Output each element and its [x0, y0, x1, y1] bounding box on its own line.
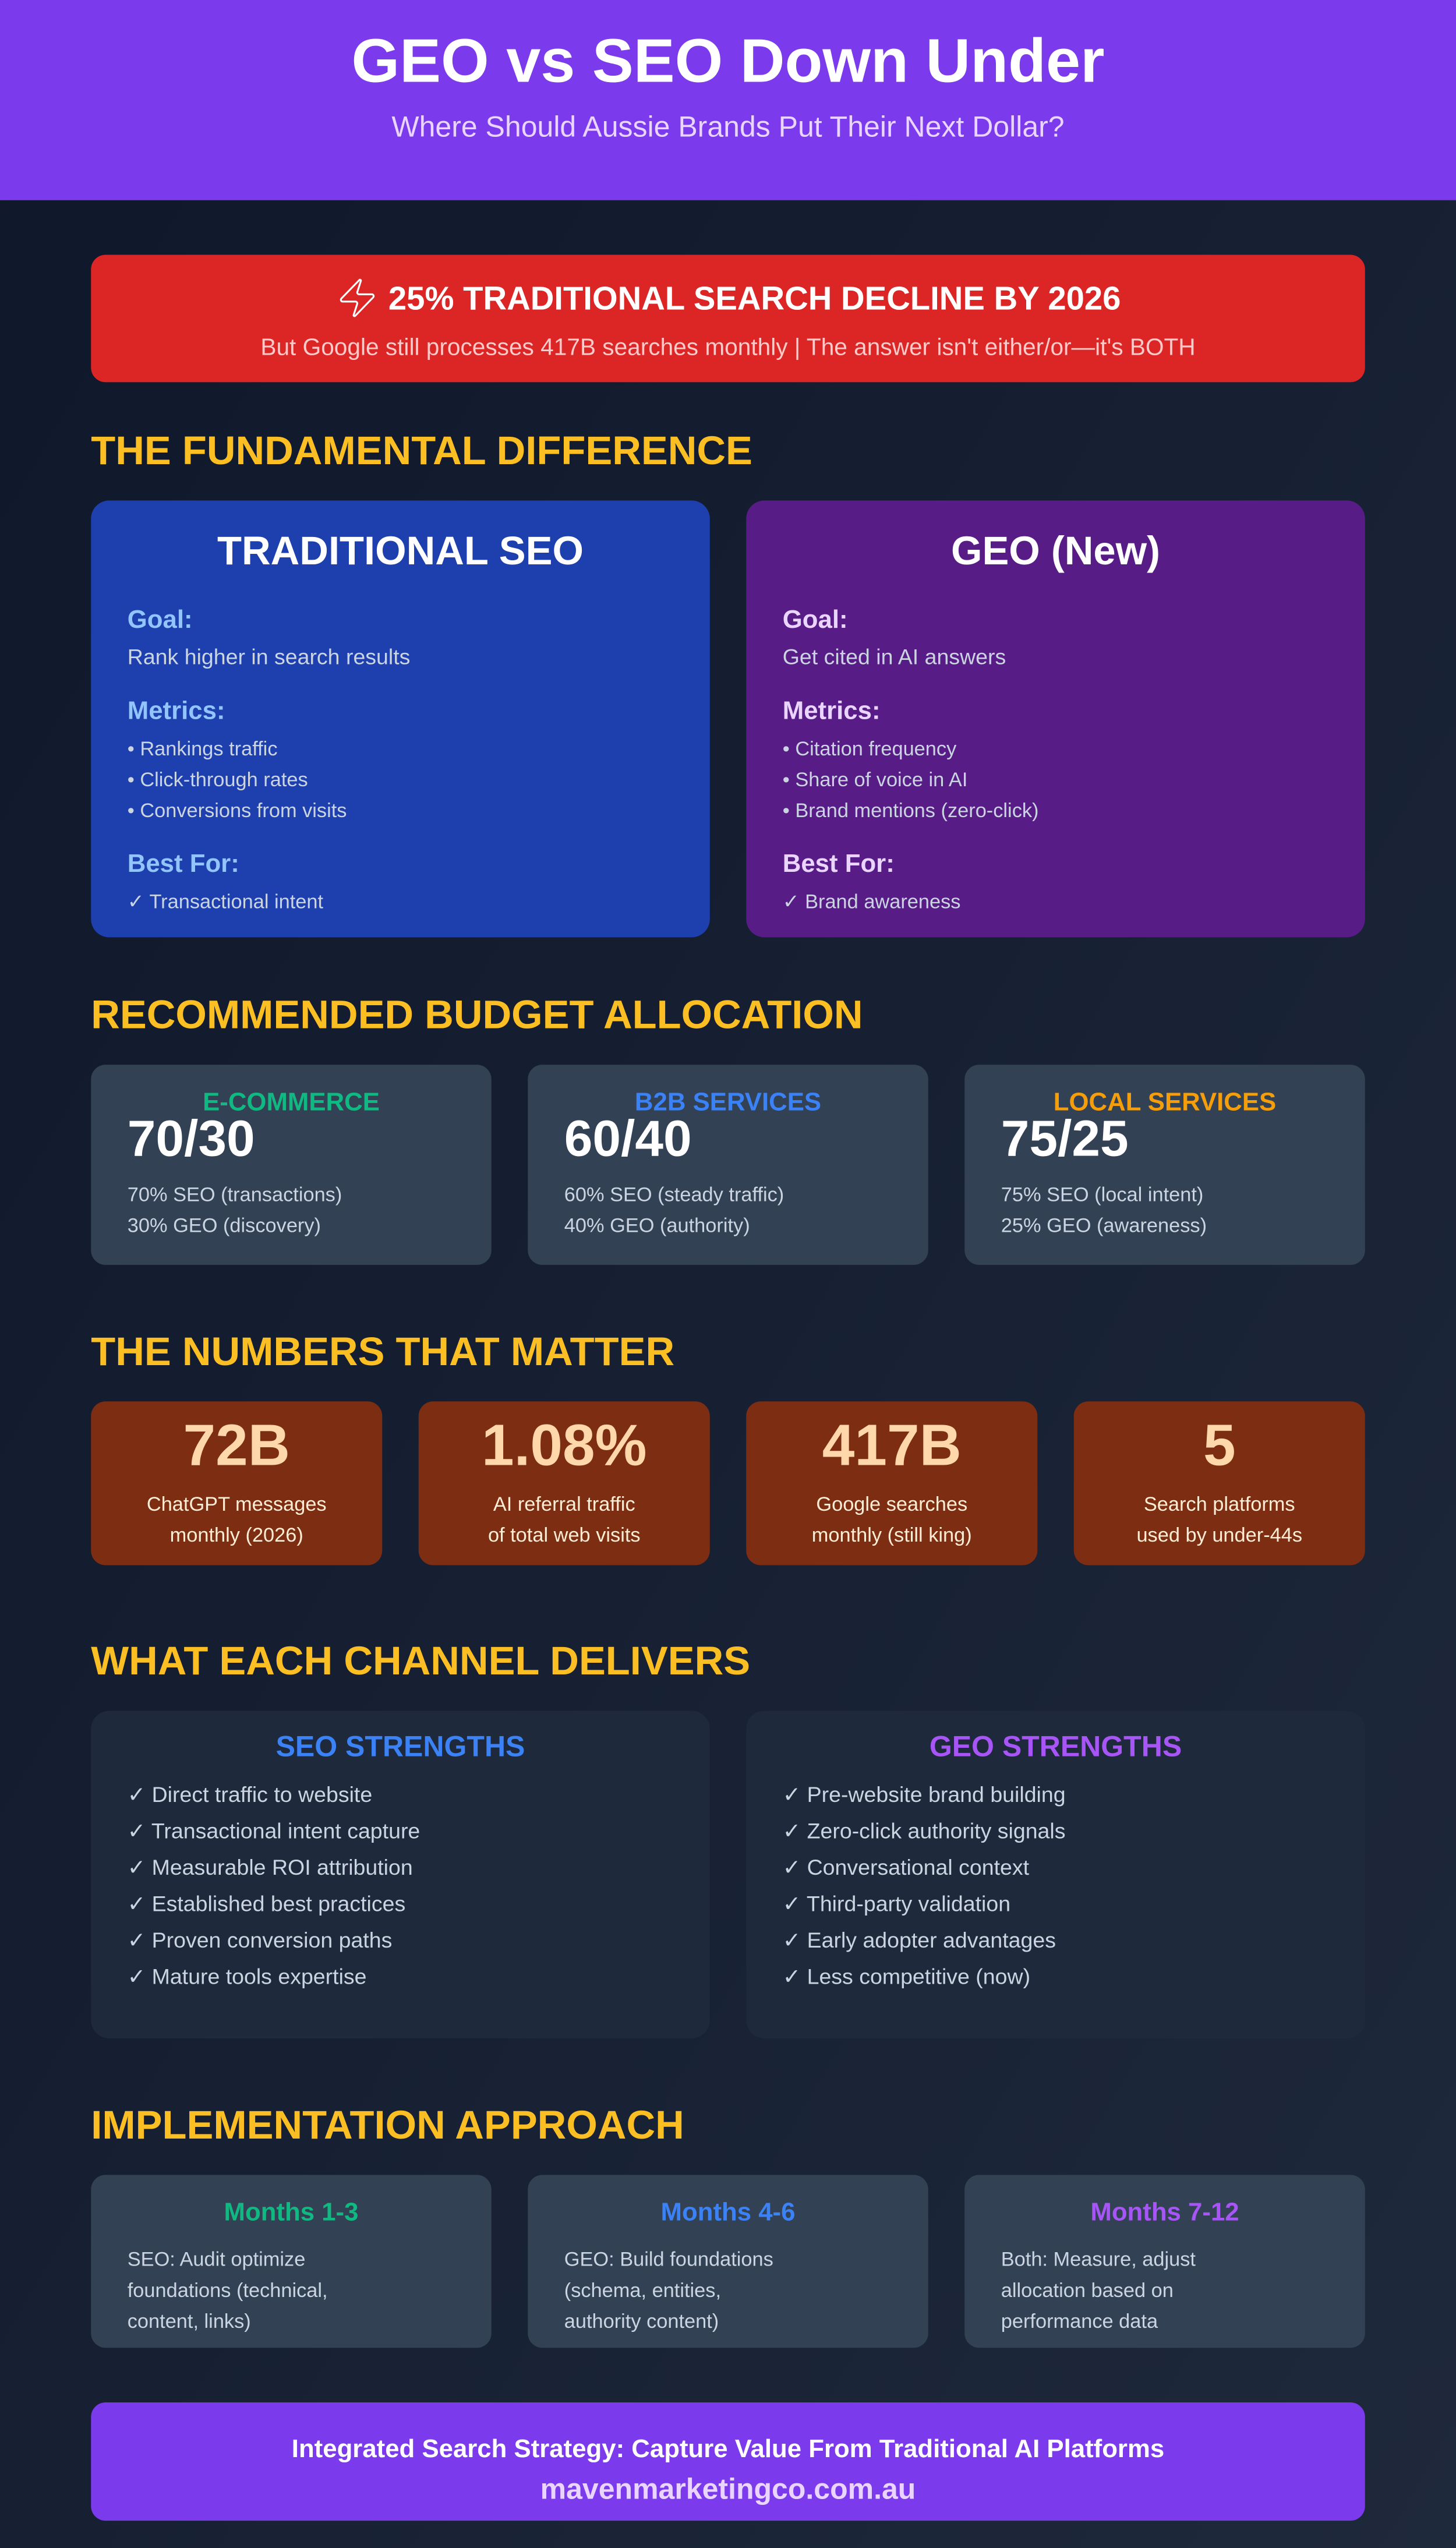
split value: 60/40: [564, 1109, 692, 1167]
strengths list: ✓ Conversational context: [783, 1855, 1030, 1879]
split value: 70/30: [128, 1109, 255, 1167]
stat number: 72B: [183, 1413, 290, 1478]
stat number: 1.08%: [482, 1413, 647, 1478]
best for text: ✓ Brand awareness: [783, 890, 960, 913]
goal text: Get cited in AI answers: [783, 645, 1006, 669]
strengths list: ✓ Transactional intent capture: [128, 1818, 420, 1843]
stat: 417B: [746, 1401, 1037, 1565]
phase title: Months 1-3: [224, 2198, 358, 2227]
strengths list: ✓ Established best practices: [128, 1891, 405, 1916]
goal label: Goal:: [783, 605, 848, 634]
panel: GEO strengths: [746, 1711, 1365, 2038]
card label: B2B SERVICES: [635, 1087, 821, 1116]
stat label: of total web visits: [488, 1524, 641, 1546]
card label: E-COMMERCE: [203, 1087, 380, 1116]
metrics list: [783, 738, 1038, 822]
panel: GEO: [746, 500, 1365, 937]
stat label: Google searches: [816, 1493, 967, 1515]
strengths list: ✓ Measurable ROI attribution: [128, 1855, 413, 1879]
heading: the numbers that matter: THE NUMBERS THAT MATTER: [91, 1329, 674, 1374]
stat: 72B: [91, 1401, 382, 1565]
strengths list: ✓ Mature tools expertise: [128, 1964, 367, 1988]
footer tagline: Integrated Search Strategy: Capture Value From Traditional AI Platforms: [292, 2434, 1164, 2463]
goal text: Rank higher in search results: [128, 645, 410, 669]
phase text: SEO: Audit optimize: [128, 2249, 305, 2271]
panel title: GEO (New): [951, 528, 1160, 573]
alert banner: [91, 255, 1365, 382]
phase text: performance data: [1001, 2310, 1158, 2333]
goal label: Goal:: [128, 605, 193, 634]
strengths list: ✓ Less competitive (now): [783, 1964, 1030, 1988]
stat number: 5: [1203, 1413, 1236, 1478]
metrics list: • Click-through rates: [128, 769, 308, 791]
split details: [1001, 1183, 1207, 1237]
phase text: authority content): [564, 2310, 719, 2333]
panel title: TRADITIONAL SEO: [217, 528, 584, 573]
strengths list: ✓ Early adopter advantages: [783, 1928, 1056, 1952]
phase text: [128, 2249, 328, 2333]
card: e-commerce: [91, 1065, 492, 1265]
stat: 1.08%: [419, 1401, 710, 1565]
stat label: [1136, 1493, 1302, 1546]
phase title: Months 7-12: [1090, 2198, 1239, 2227]
metrics list: • Conversions from visits: [128, 800, 347, 822]
stat label: ChatGPT messages: [147, 1493, 327, 1515]
best for label: Best For:: [783, 849, 895, 878]
stat: 5: [1074, 1401, 1365, 1565]
title: GEO vs SEO Down Under: [352, 26, 1104, 96]
phase text: allocation based on: [1001, 2280, 1174, 2302]
phase card: months 4-6: [528, 2175, 928, 2348]
split value: 75/25: [1001, 1109, 1129, 1167]
phase text: Both: Measure, adjust: [1001, 2249, 1196, 2271]
card: B2B services: [528, 1065, 928, 1265]
metrics list: • Rankings traffic: [128, 738, 277, 760]
heading: the fundamental difference: THE FUNDAMENTAL DIFFERENCE: [91, 428, 752, 473]
best for text: ✓ Transactional intent: [128, 890, 323, 913]
metrics list: [128, 738, 347, 822]
split details: 70% SEO (transactions): [128, 1183, 342, 1206]
subtitle: Where Should Aussie Brands Put Their Next Dollar?: [391, 110, 1065, 143]
stat label: [147, 1493, 327, 1546]
alert headline: 25% TRADITIONAL SEARCH DECLINE BY 2026: [388, 280, 1121, 316]
stat label: AI referral traffic: [493, 1493, 635, 1515]
header banner: [0, 0, 1456, 200]
stat label: monthly (2026): [170, 1524, 303, 1546]
phase text: (schema, entities,: [564, 2280, 721, 2302]
card label: LOCAL SERVICES: [1054, 1087, 1276, 1116]
stat number: 417B: [822, 1413, 962, 1478]
strengths list: ✓ Third-party validation: [783, 1891, 1010, 1916]
phase text: [1001, 2249, 1196, 2333]
panel title: SEO STRENGTHS: [276, 1730, 525, 1763]
split details: [564, 1183, 784, 1237]
split details: 25% GEO (awareness): [1001, 1215, 1207, 1237]
stat label: used by under-44s: [1136, 1524, 1302, 1546]
best for label: Best For:: [128, 849, 239, 878]
card: local services: [964, 1065, 1365, 1265]
phase text: GEO: Build foundations: [564, 2249, 773, 2271]
heading: what each channel delivers: WHAT EACH CHANNEL DELIVERS: [91, 1638, 750, 1683]
footer website: mavenmarketingco.com.au: [540, 2473, 916, 2505]
panel: SEO strengths: [91, 1711, 710, 2038]
phase text: content, links): [128, 2310, 251, 2333]
strengths list: [783, 1782, 1066, 1988]
phase card: months 7-12: [964, 2175, 1365, 2348]
stat label: monthly (still king): [812, 1524, 972, 1546]
phase card: months 1-3: [91, 2175, 492, 2348]
strengths list: ✓ Zero-click authority signals: [783, 1818, 1066, 1843]
phase title: Months 4-6: [661, 2198, 795, 2227]
strengths list: ✓ Direct traffic to website: [128, 1782, 372, 1807]
metrics list: • Brand mentions (zero-click): [783, 800, 1039, 822]
stat label: [812, 1493, 972, 1546]
split details: 30% GEO (discovery): [128, 1215, 321, 1237]
split details: [128, 1183, 342, 1237]
metrics list: • Citation frequency: [783, 738, 957, 760]
stat label: Search platforms: [1144, 1493, 1295, 1515]
heading: implementation approach: IMPLEMENTATION APPROACH: [91, 2102, 684, 2147]
stat label: [488, 1493, 641, 1546]
split details: 40% GEO (authority): [564, 1215, 750, 1237]
phase text: [564, 2249, 773, 2333]
panel title: GEO STRENGTHS: [930, 1730, 1182, 1763]
icon: lightning bolt: [341, 280, 374, 316]
split details: 60% SEO (steady traffic): [564, 1183, 784, 1206]
heading: recommended budget allocation: RECOMMENDED BUDGET ALLOCATION: [91, 992, 863, 1037]
footer banner: [91, 2402, 1365, 2521]
alert subtext: But Google still processes 417B searches monthly | The answer isn't either/or—it's BOTH: [260, 333, 1196, 360]
metrics label: Metrics:: [128, 696, 225, 725]
strengths list: ✓ Proven conversion paths: [128, 1928, 392, 1952]
phase text: foundations (technical,: [128, 2280, 328, 2302]
panel: traditional SEO: [91, 500, 710, 937]
strengths list: [128, 1782, 420, 1988]
metrics label: Metrics:: [783, 696, 881, 725]
strengths list: ✓ Pre-website brand building: [783, 1782, 1066, 1807]
metrics list: • Share of voice in AI: [783, 769, 967, 791]
split details: 75% SEO (local intent): [1001, 1183, 1203, 1206]
